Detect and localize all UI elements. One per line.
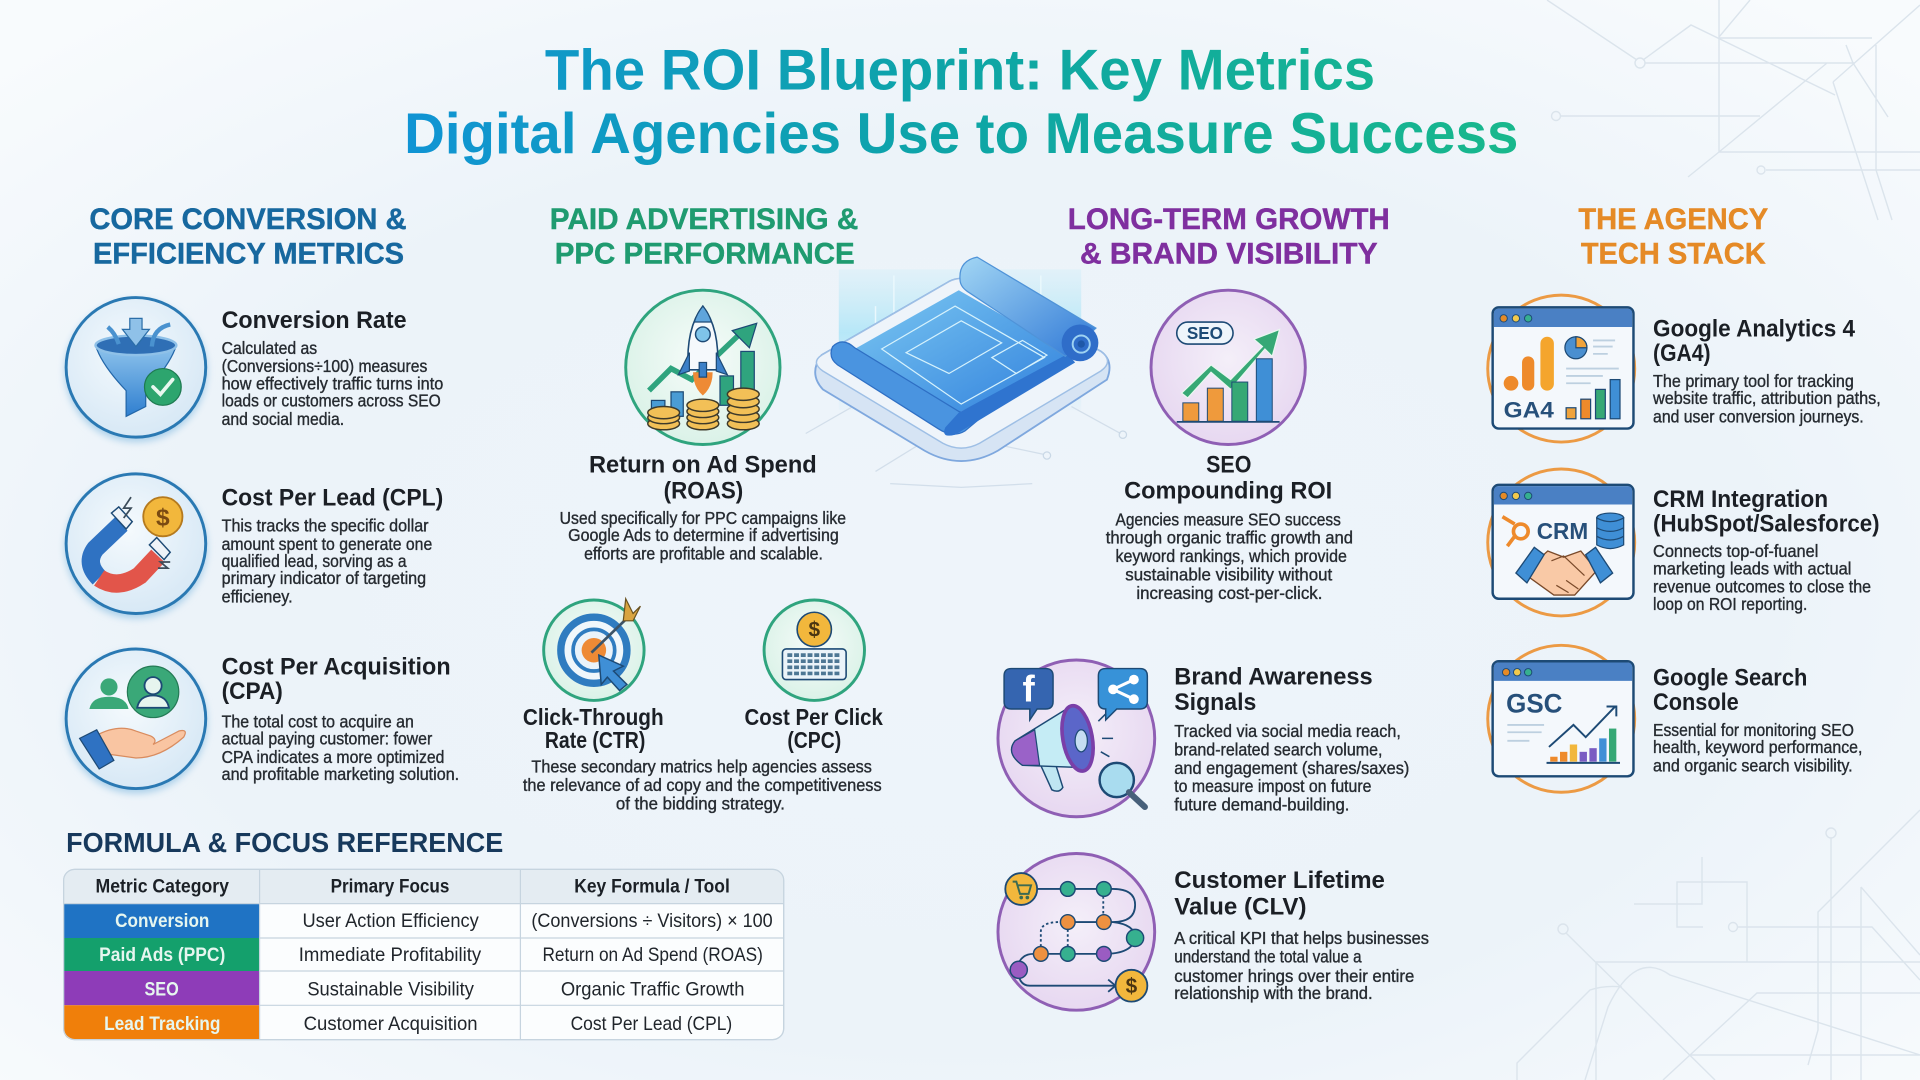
metric text: SEO compounding ROI: Compounding ROI [1124, 477, 1332, 504]
decorative circuit lines [1517, 0, 1920, 1080]
metric text: CRM integration: Connects top-of-fuanel [1653, 541, 1818, 561]
metric text: return on ad spend: (ROAS) [664, 477, 743, 504]
icon: CRM browser window [1488, 469, 1635, 616]
icon: magnet and coin [65, 474, 207, 618]
heading: core conversion: CORE CONVERSION & [89, 203, 407, 236]
metric text: customer lifetime value: understand the total value a [1174, 946, 1362, 966]
metric text: CRM integration: (HubSpot/Salesforce) [1653, 510, 1880, 537]
metric text: cost per click [744, 704, 883, 753]
metric text: customer lifetime value: Customer Lifetime [1174, 867, 1385, 894]
table row: SEO: SEO [144, 979, 179, 1001]
metric text: cost per acquisition: CPA indicates a more optimized [222, 747, 444, 767]
metric text: conversion rate [222, 307, 443, 429]
table row: SEO: Sustainable Visibility [307, 979, 474, 1001]
metric text: cost per lead [222, 485, 443, 606]
metric text: cost per acquisition: and profitable marketing solution. [222, 764, 459, 784]
metric text: cost per lead: efficieney. [222, 586, 293, 606]
metric text: cost per acquisition: The total cost to acquire an [222, 711, 414, 731]
icon: SEO growth chart [1151, 290, 1305, 444]
heading: agency tech stack: THE AGENCY [1578, 203, 1769, 236]
metric text: brand awareness signals: to measure impost on future [1174, 776, 1371, 796]
title: The ROI Blueprint: Key Metrics [545, 38, 1375, 102]
metric text: customer lifetime value: A critical KPI that helps businesses [1174, 928, 1429, 948]
metric text: customer lifetime value [1174, 867, 1429, 1003]
metric text: cost per acquisition [222, 654, 459, 784]
metric text: customer lifetime value: customer hrings over their entire [1174, 966, 1414, 986]
table row: lead tracking [104, 1013, 732, 1035]
icon: coin over keyboard: $ [808, 619, 820, 642]
metric text: cost per acquisition: actual paying customer: fower [222, 728, 433, 748]
heading: core conversion [89, 203, 407, 270]
metric text: conversion rate: (Conversions÷100) measures [222, 356, 427, 376]
metric text: conversion rate: Calculated as [222, 338, 317, 358]
table row: paid ads: Return on Ad Spend (ROAS) [542, 944, 763, 966]
metric text: SEO compounding ROI: Agencies measure SEO success [1116, 509, 1341, 529]
table row: paid ads: Paid Ads (PPC) [99, 944, 225, 966]
icon: megaphone with social bubbles [998, 660, 1155, 817]
table [64, 869, 784, 1040]
metric text: CRM integration [1653, 486, 1880, 614]
table row: SEO: Organic Traffic Growth [561, 979, 744, 1001]
table row: conversion [115, 910, 773, 932]
icon: CRM browser window: CRM [1537, 518, 1588, 544]
heading: paid advertising [550, 203, 858, 270]
metric text: CRM integration: marketing leads with actual [1653, 558, 1851, 578]
table row: lead tracking: Customer Acquisition [304, 1013, 478, 1035]
table row: conversion: User Action Efficiency [302, 910, 479, 932]
panel: long-term growth and brand visibility [998, 203, 1429, 1010]
description: secondary metrics: the relevance of ad copy and the competitiveness [523, 775, 882, 795]
panel: paid advertising and PPC performance [523, 203, 883, 813]
metric text: customer lifetime value: relationship with the brand. [1174, 983, 1373, 1003]
table row: conversion: Conversion [115, 910, 209, 932]
table header row: Metric Category [96, 876, 229, 898]
heading: core conversion: EFFICIENCY METRICS [93, 237, 404, 270]
metric text: cost per click: (CPC) [787, 727, 841, 753]
metric text: cost per lead: primary indicator of targeting [222, 568, 426, 588]
table header row [96, 876, 730, 898]
metric text: customer lifetime value: Value (CLV) [1174, 894, 1307, 921]
icon: hand holding customer [65, 649, 207, 793]
description: secondary metrics [523, 757, 882, 813]
metric text: return on ad spend: Return on Ad Spend [589, 452, 817, 479]
metric text: cost per lead: amount spent to generate one [222, 534, 432, 554]
heading: paid advertising: PAID ADVERTISING & [550, 203, 858, 236]
metric text: brand awareness signals [1174, 663, 1409, 815]
icon: GA4 browser window: GA4 [1504, 398, 1555, 423]
icon: GSC browser window [1488, 645, 1635, 792]
heading: formula reference: FORMULA & FOCUS REFERENCE [66, 827, 503, 858]
table row: lead tracking: Cost Per Lead (CPL) [571, 1013, 732, 1035]
central blueprint illustration [806, 257, 1127, 487]
metric text: SEO compounding ROI: keyword rankings, which provide [1116, 546, 1347, 566]
table row: paid ads [99, 944, 763, 966]
metric text: brand awareness signals: brand-related search volume, [1174, 740, 1382, 760]
metric text: conversion rate: Conversion Rate [222, 307, 407, 334]
metric text: google analytics 4: The primary tool for tracking [1653, 371, 1854, 391]
icon: coin over keyboard [764, 600, 864, 700]
metric text: google analytics 4: (GA4) [1653, 340, 1711, 367]
metric text: return on ad spend: Google Ads to determine if advertising [568, 525, 839, 545]
icon: rocket growth and coins [626, 290, 780, 444]
title: Digital Agencies Use to Measure Success [404, 102, 1518, 166]
metric text: google search console: Google Search [1653, 665, 1807, 692]
metric text: CRM integration: revenue outcomes to close the [1653, 577, 1871, 597]
description: secondary metrics: of the bidding strategy. [616, 793, 785, 813]
metric text: cost per acquisition: Cost Per Acquisition [222, 654, 451, 681]
heading: paid advertising: PPC PERFORMANCE [555, 237, 855, 270]
metric text: brand awareness signals: future demand-building. [1174, 795, 1349, 815]
metric text: SEO compounding ROI: SEO [1206, 452, 1251, 479]
metric text: CRM integration: loop on ROI reporting. [1653, 594, 1807, 614]
metric text: SEO compounding ROI [1106, 452, 1353, 603]
heading: agency tech stack: TECH STACK [1581, 237, 1766, 270]
icon: GSC browser window: GSC [1506, 689, 1562, 719]
table header row: Primary Focus [331, 876, 449, 898]
metric text: conversion rate: and social media. [222, 409, 344, 429]
metric text: return on ad spend [560, 452, 846, 564]
icon: SEO growth chart: SEO [1187, 323, 1223, 343]
table row: SEO [144, 979, 744, 1001]
icon: megaphone with social bubbles: f [1022, 669, 1035, 710]
icon: customer journey path: $ [1126, 975, 1138, 998]
title [404, 38, 1518, 166]
metric text: conversion rate: loads or customers across SEO [222, 391, 441, 411]
icon: customer journey path [998, 853, 1155, 1010]
metric text: brand awareness signals: Tracked via social media reach, [1174, 721, 1401, 741]
table header row: Key Formula / Tool [574, 876, 730, 898]
icon: target with arrow [544, 599, 644, 700]
metric text: google analytics 4: Google Analytics 4 [1653, 316, 1855, 343]
metric text: SEO compounding ROI: increasing cost-per-click. [1136, 583, 1322, 603]
metric text: google analytics 4: website traffic, attribution paths, [1652, 388, 1881, 408]
table row: conversion: (Conversions ÷ Visitors) × 100 [531, 910, 773, 932]
heading: long-term growth [1068, 203, 1390, 270]
metric text: google search console: Console [1653, 689, 1739, 716]
metric text: google search console: and organic search visibility. [1653, 755, 1853, 775]
table row: paid ads: Immediate Profitability [299, 944, 481, 966]
metric text: cost per click: Cost Per Click [744, 704, 883, 730]
metric text: click-through rate: Click-Through [523, 704, 664, 730]
metric text: cost per lead: Cost Per Lead (CPL) [222, 485, 443, 512]
metric text: google search console [1653, 665, 1862, 775]
metric text: google search console: Essential for monitoring SEO [1653, 720, 1854, 740]
metric text: SEO compounding ROI: sustainable visibility without [1125, 564, 1332, 584]
metric text: google search console: health, keyword performance, [1653, 737, 1862, 757]
metric text: return on ad spend: Used specifically for PPC campaigns like [560, 508, 846, 528]
heading: agency tech stack [1578, 203, 1769, 270]
heading: long-term growth: LONG-TERM GROWTH [1068, 203, 1390, 236]
panel: the agency tech stack [1488, 203, 1881, 792]
metric text: click-through rate [523, 704, 664, 753]
metric text: brand awareness signals: Brand Awareness [1174, 663, 1373, 690]
metric text: google analytics 4: and user conversion journeys. [1653, 406, 1864, 426]
panel: core conversion and efficiency metrics [65, 203, 459, 793]
metric text: SEO compounding ROI: through organic traffic growth and [1106, 528, 1353, 548]
icon: funnel with check [65, 298, 207, 442]
metric text: click-through rate: Rate (CTR) [545, 727, 645, 753]
icon: GA4 browser window [1488, 295, 1635, 442]
panel: formula and focus reference [64, 827, 784, 1040]
metric text: cost per lead: This tracks the specific dollar [222, 515, 429, 535]
heading: long-term growth: & BRAND VISIBILITY [1080, 237, 1378, 270]
metric text: conversion rate: how effectively traffic turns into [222, 373, 443, 393]
metric text: brand awareness signals: Signals [1174, 689, 1256, 716]
icon: magnet and coin: $ [156, 504, 170, 531]
metric text: google analytics 4 [1652, 316, 1881, 426]
metric text: brand awareness signals: and engagement (shares/saxes) [1174, 758, 1409, 778]
metric text: CRM integration: CRM Integration [1653, 486, 1828, 513]
metric text: return on ad spend: efforts are profitable and scalable. [584, 544, 823, 564]
description: secondary metrics: These secondary matrics help agencies assess [531, 757, 872, 777]
table row: lead tracking: Lead Tracking [104, 1013, 220, 1035]
metric text: cost per lead: qualified lead, sorving as a [222, 551, 407, 571]
metric text: cost per acquisition: (CPA) [222, 678, 283, 705]
